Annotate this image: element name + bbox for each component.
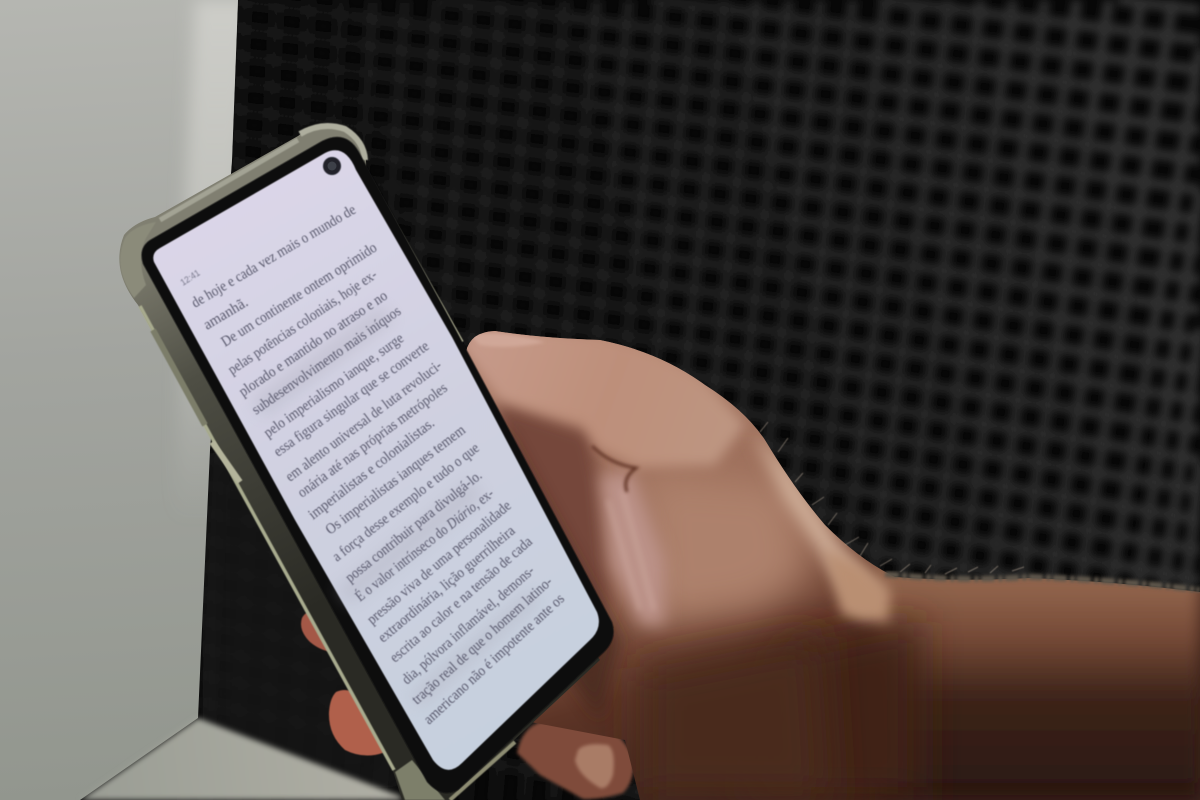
- book text on screen: De um continente ontem oprimido: [219, 240, 380, 350]
- case: side button: [153, 330, 205, 425]
- case: right edge light stripe: [364, 168, 462, 342]
- book text on screen: pressão viva de uma personalidade: [364, 498, 515, 628]
- book text on screen: Os imperialistas ianques temem: [323, 422, 469, 538]
- finger: lower left behind phone: [329, 690, 385, 756]
- book text on screen: É o valor intrínseco do Diário, ex-: [352, 485, 497, 605]
- finger: upper left behind phone: [301, 612, 335, 652]
- case: top-left corner bumper: [120, 222, 156, 298]
- fingernail: [575, 744, 614, 788]
- book text on screen: plorado e mantido no atraso e no: [236, 288, 391, 400]
- case: bottom corner: [395, 760, 445, 800]
- thumb: [460, 325, 745, 467]
- screen: [153, 150, 599, 770]
- book text on screen: em alento universal de luta revoluci-: [283, 358, 445, 485]
- book text on screen: extraordinária, lição guerrilheira: [375, 523, 519, 646]
- book text on screen: escrita ao calor e na tensão de cada: [387, 534, 536, 666]
- palm fold streaks: [606, 502, 640, 608]
- knuckle highlight band: [752, 430, 880, 620]
- case: lower side button: [212, 442, 240, 482]
- status bar clock: 12:41: [179, 268, 202, 288]
- clear case: outer shell: [119, 126, 600, 800]
- light palm: [640, 470, 810, 625]
- floor: [80, 718, 402, 800]
- book text on screen: tração real de que o homem latino-: [409, 574, 556, 708]
- wrist shadow: [640, 635, 830, 800]
- book text on screen: pelo imperialismo ianque, surge: [261, 330, 407, 441]
- soft shadow bands on screen: [250, 305, 540, 708]
- book text on screen: pelas potências coloniais, hoje ex-: [225, 267, 380, 378]
- palm and wrist: [440, 320, 1200, 800]
- book text on screen: dia, pólvora inflamável, demons-: [399, 563, 538, 688]
- pale palm folds: [600, 472, 665, 625]
- phone: [119, 126, 614, 800]
- book text on screen: [189, 202, 568, 728]
- bright wall edge strip: [182, 0, 238, 455]
- book text on screen: americano não é impotente ante os: [421, 591, 568, 728]
- hand: [301, 320, 1200, 800]
- case: top edge light: [160, 140, 298, 220]
- book text on screen: amanhã.: [201, 294, 251, 333]
- book text on screen: de hoje e cada vez mais o mundo de: [189, 202, 359, 311]
- case: bottom right edge: [450, 742, 515, 800]
- blend wrist into arm: [806, 602, 938, 799]
- arm tone: [875, 555, 1200, 800]
- book text on screen: possa contribuir para divulgá-lo.: [343, 468, 485, 586]
- dark shade near phone: [512, 434, 624, 711]
- camera hole: [323, 157, 341, 175]
- palm crease: [592, 446, 636, 492]
- finger: bottom with nail: [517, 722, 634, 799]
- arm hair fringe: [885, 574, 1200, 590]
- thumb tip nail: [470, 334, 545, 347]
- book text on screen: subdesenvolvimento mais iníquos: [249, 303, 404, 418]
- case: left edge light stripe: [140, 306, 394, 770]
- dim haze in left mesh: [190, 440, 420, 800]
- wrist specular: [825, 550, 890, 622]
- case: top-right bumper: [300, 126, 365, 160]
- shadow below thumb: [495, 400, 613, 608]
- book text on screen: essa figura singular que se converte: [271, 338, 433, 460]
- book text on screen: a força desse exemplo e tudo o que: [330, 440, 483, 565]
- knuckle hair: [760, 422, 1024, 574]
- book text on screen: imperialistas e colonialistas.: [306, 415, 438, 523]
- white wall on left: [0, 0, 260, 800]
- phone bezel: [142, 137, 614, 793]
- book text on screen: onária até nas próprias metrópoles: [295, 380, 451, 501]
